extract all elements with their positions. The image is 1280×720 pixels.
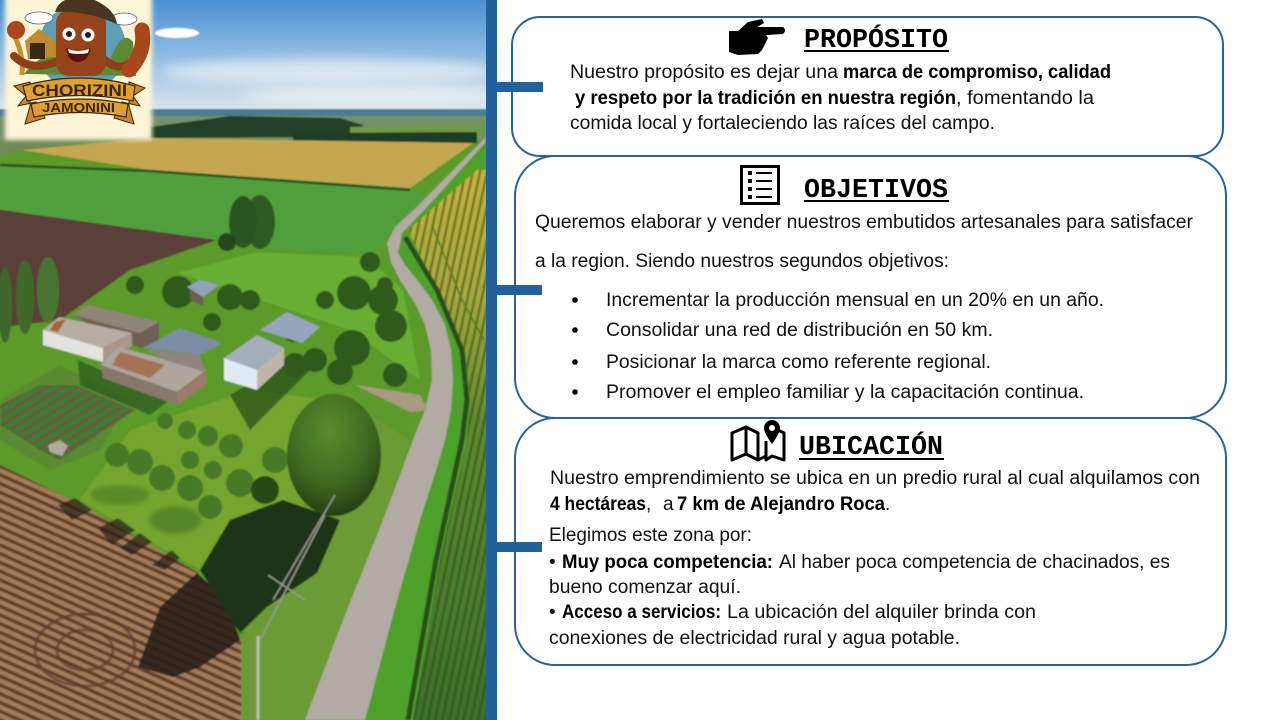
vertical blue divider bar <box>486 0 497 720</box>
text block: propósito <box>570 62 1111 134</box>
logo: Chorizini Jamonini <box>5 0 152 140</box>
connector to propósito panel <box>497 82 543 92</box>
text block: ubicación reasons: Al haber poca competencia de chacinados, es <box>779 552 1170 573</box>
text block: objetivos intro <box>535 212 1194 272</box>
text block: ubicación reasons <box>549 525 1170 649</box>
text block: ubicación reasons: conexiones de electricidad rural y agua potable. <box>549 628 960 649</box>
heading: ubicación: UBICACIÓN <box>799 430 943 463</box>
heading: objetivos: OBJETIVOS <box>804 176 948 206</box>
text block: propósito: comida local y fortaleciendo las raíces del campo. <box>570 113 995 134</box>
text block: ubicación description: 7 km de Alejandro Roca <box>677 494 885 515</box>
panel: propósito <box>511 17 1223 156</box>
icon: map with pin <box>732 420 784 460</box>
list: objetivos: Posicionar la marca como referente regional. <box>606 352 991 373</box>
text block: ubicación description: Nuestro emprendimiento se ubica en un predio rural al cual alquilamos con <box>550 468 1200 489</box>
text block: ubicación reasons: Muy poca competencia: <box>562 552 773 573</box>
text block: ubicación reasons: Elegimos este zona por: <box>549 525 752 546</box>
list: objetivos: Consolidar una red de distribución en 50 km. <box>606 320 993 341</box>
connector to objetivos panel <box>497 285 542 295</box>
text block: objetivos intro: Queremos elaborar y vender nuestros embutidos artesanales para satisfacer <box>535 212 1194 233</box>
text block: propósito: , fomentando la <box>956 88 1094 109</box>
list: objetivos <box>572 290 1104 403</box>
text block: propósito: marca de compromiso, calidad <box>843 62 1111 83</box>
text block: ubicación description <box>550 468 1200 515</box>
text block: ubicación reasons: Acceso a servicios: <box>562 602 721 623</box>
text block: ubicación reasons: • <box>549 602 556 623</box>
text block: ubicación description: . <box>885 494 890 515</box>
text block: ubicación reasons: La ubicación del alquiler brinda con <box>727 602 1036 623</box>
text block: ubicación description: 4 hectáreas <box>550 494 646 515</box>
heading: propósito: PROPÓSITO <box>804 23 948 56</box>
connector to ubicación panel <box>497 542 542 552</box>
text block: objetivos intro: a la region. Siendo nuestros segundos objetivos: <box>535 251 949 272</box>
text block: propósito: y respeto por la tradición en nuestra región <box>575 88 956 109</box>
text block: propósito: Nuestro propósito es dejar una <box>570 62 838 83</box>
text block: ubicación description: , <box>646 494 651 515</box>
icon: pointing hand <box>729 19 785 55</box>
logo: Chorizini Jamonini: CHORIZINI <box>32 81 127 100</box>
panel: objetivos <box>514 156 1226 418</box>
list: objetivos: Promover el empleo familiar y la capacitación continua. <box>606 382 1084 403</box>
logo: Chorizini Jamonini: JAMONINI <box>42 100 115 115</box>
icon: checklist <box>742 166 778 204</box>
photo: aerial view of the farm and fields <box>0 0 520 720</box>
text block: ubicación description: a <box>663 494 674 515</box>
panel: ubicación <box>514 418 1226 665</box>
text block: ubicación reasons: bueno comenzar aquí. <box>549 577 741 598</box>
list: objetivos: Incrementar la producción mensual en un 20% en un año. <box>606 290 1104 311</box>
text block: ubicación reasons: • <box>549 552 556 573</box>
